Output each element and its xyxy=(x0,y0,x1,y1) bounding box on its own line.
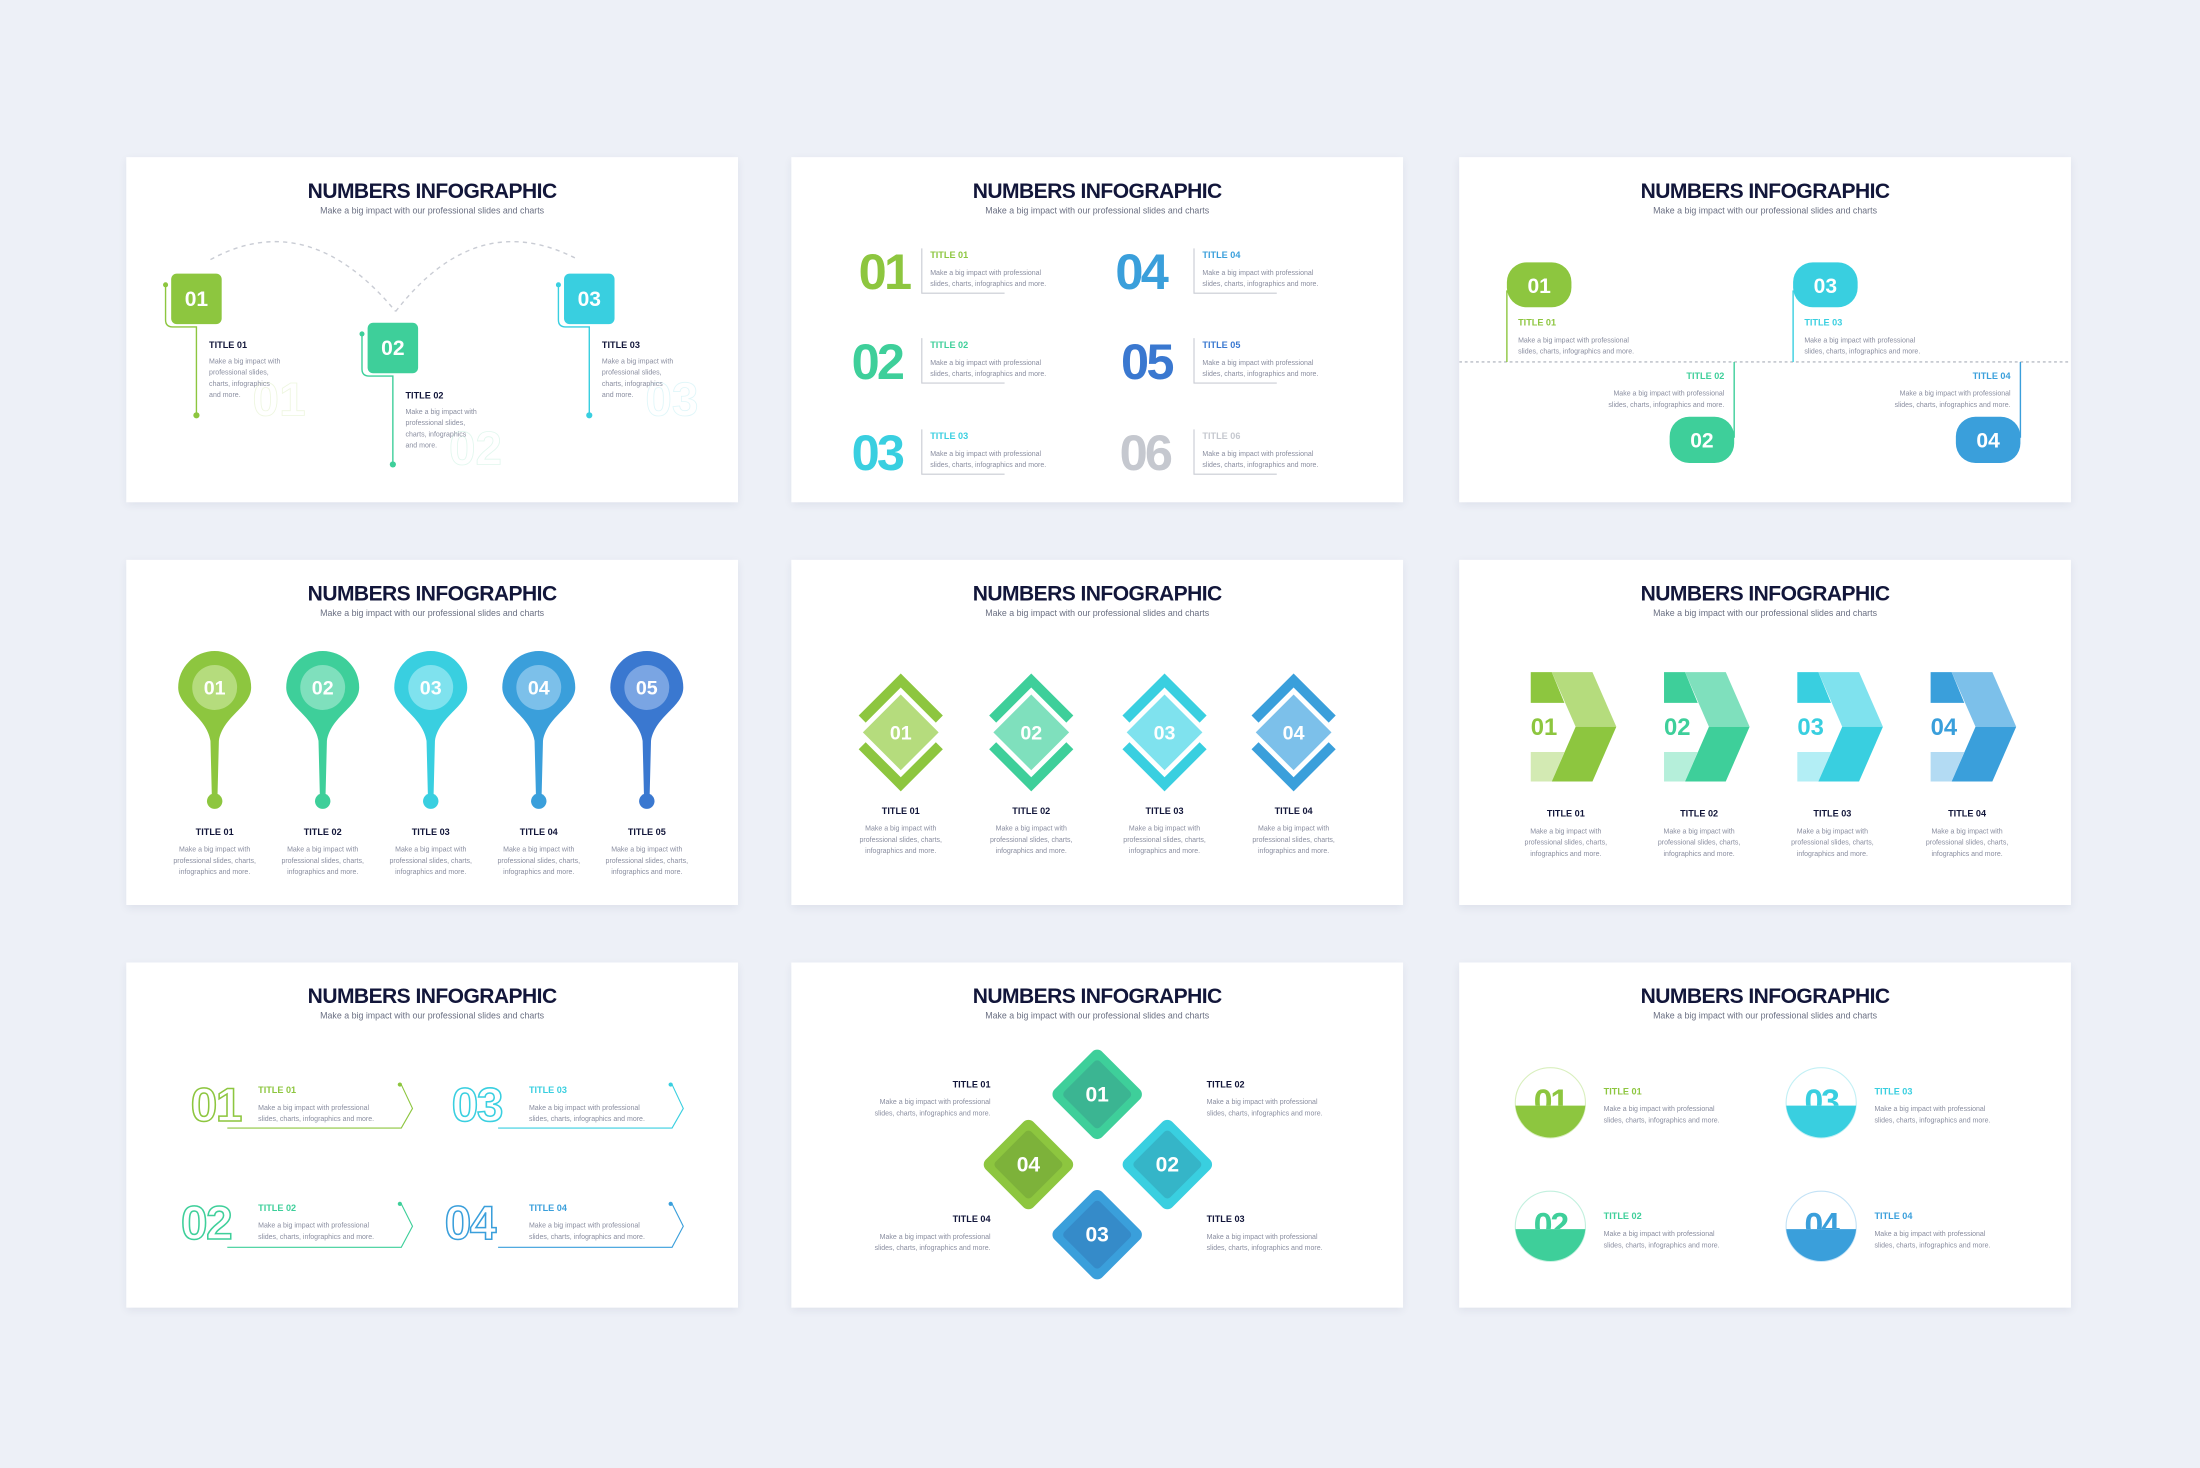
text: desc 01: professional slides, xyxy=(209,369,269,377)
diagram: timeline: TITLE 04 xyxy=(1973,371,2012,381)
diagram: chevrons: infographics and more. xyxy=(1530,851,1601,858)
diagram: numbers list: 02 xyxy=(852,333,904,390)
diagram: outline numbers: TITLE 02 xyxy=(258,1203,296,1213)
diagram: outline numbers: slides, charts, infographics and more. xyxy=(529,1234,645,1241)
diagram: boxes and connectors xyxy=(163,240,698,475)
diagram: numbers list: TITLE 05 xyxy=(1202,340,1240,350)
diagram: chevrons: 03 xyxy=(1797,714,1824,741)
diagram: chevrons: Make a big impact with xyxy=(1931,828,2003,835)
diagram: drops: infographics and more. xyxy=(287,869,358,876)
diagram: half circles: Make a big impact with professional xyxy=(1874,1231,1986,1238)
diagram: outline numbers: TITLE 04 xyxy=(529,1203,568,1213)
text: desc 03: charts, infographics xyxy=(602,380,663,389)
heading: NUMBERS INFOGRAPHIC xyxy=(308,582,557,606)
diagram: numbers list: TITLE 02 xyxy=(930,340,968,350)
diagram: diamond cluster: 03 xyxy=(1085,1224,1109,1247)
diagram: chevrons: 04 xyxy=(1931,714,1958,741)
diagram: half circles: TITLE 03 xyxy=(1874,1086,1912,1096)
diagram: drops: TITLE 05 xyxy=(628,827,666,837)
diagram: diamond cluster: slides, charts, infographics and more. xyxy=(1207,1110,1323,1117)
diagram: outline numbers: 01 xyxy=(191,1079,242,1132)
diagram: drops: professional slides, charts, xyxy=(389,858,472,865)
diagram: timeline: 04 xyxy=(1976,430,2000,453)
diagram: numbers list: 05 xyxy=(1121,333,1173,390)
diagram: chevrons: infographics and more. xyxy=(1931,851,2003,858)
diagram: timeline: Make a big impact with professional xyxy=(1804,337,1916,344)
diagram: numbers list: slides, charts, infographics and more. xyxy=(930,462,1046,469)
diagram: drops xyxy=(173,651,688,876)
diagram: timeline: 01 xyxy=(1527,275,1551,298)
text: title 01: TITLE 01 xyxy=(209,341,247,351)
diagram: half circles: 02 xyxy=(1534,1207,1568,1244)
diagram: outline numbers: Make a big impact with professional xyxy=(529,1223,640,1230)
diagram: numbers list: Make a big impact with professional xyxy=(1202,451,1314,458)
diagram: drops: Make a big impact with xyxy=(179,847,250,854)
panel: slide 2 big numbers list xyxy=(791,157,1403,502)
diagram: numbers list: Make a big impact with professional xyxy=(930,270,1042,277)
diagram: outline numbers: Make a big impact with professional xyxy=(529,1105,640,1112)
subtitle: Make a big impact with our professional slides and charts xyxy=(1653,1012,1877,1021)
diagram: timeline: slides, charts, infographics and more. xyxy=(1518,349,1634,356)
diagram: diamond cluster: 01 xyxy=(1085,1083,1109,1106)
subtitle: Make a big impact with our professional slides and charts xyxy=(1653,609,1877,619)
diagram: numbers list: slides, charts, infographics and more. xyxy=(1202,371,1318,378)
text: desc 02: charts, infographics xyxy=(405,431,466,439)
diagram: drops: infographics and more. xyxy=(503,869,574,876)
text: desc 02: and more. xyxy=(405,442,437,450)
subtitle: Make a big impact with our professional slides and charts xyxy=(985,609,1209,619)
diagram: drops: Make a big impact with xyxy=(287,847,358,854)
diagram: outline numbers: 02 xyxy=(181,1197,231,1250)
heading: NUMBERS INFOGRAPHIC xyxy=(308,985,557,1009)
diagram: timeline: slides, charts, infographics and more. xyxy=(1895,402,2011,409)
diagram: diamond cluster: Make a big impact with professional xyxy=(880,1234,991,1241)
diagram: chevrons: infographics and more. xyxy=(1663,851,1735,858)
diagram: half circles xyxy=(1514,1067,1990,1262)
diagram: diamonds: 02 xyxy=(1020,722,1042,744)
diagram: outline numbers: 03 xyxy=(452,1079,502,1132)
text: desc 01: and more. xyxy=(209,391,241,400)
heading: NUMBERS INFOGRAPHIC xyxy=(973,582,1222,606)
diagram: timeline: slides, charts, infographics and more. xyxy=(1608,402,1724,409)
text: desc 02: Make a big impact with xyxy=(405,408,477,417)
diagram: drops: infographics and more. xyxy=(179,869,250,876)
diagram: boxes and connectors: 01 xyxy=(253,373,306,426)
diagram: diamonds: TITLE 03 xyxy=(1146,806,1184,816)
diagram: numbers list: TITLE 01 xyxy=(930,250,968,260)
diagram: drops: TITLE 04 xyxy=(520,827,559,837)
diagram: timeline: Make a big impact with professional xyxy=(1900,391,2011,398)
diagram: diamonds: infographics and more. xyxy=(996,848,1067,855)
diagram: numbers list: slides, charts, infographics and more. xyxy=(1202,281,1318,288)
diagram: diamonds: 04 xyxy=(1283,722,1305,744)
diagram: diamond cluster: slides, charts, infographics and more. xyxy=(1207,1245,1323,1252)
diagram: half circles: TITLE 02 xyxy=(1604,1211,1642,1221)
diagram: outline numbers: slides, charts, infographics and more. xyxy=(258,1116,374,1123)
diagram: diamond cluster: Make a big impact with professional xyxy=(1207,1234,1318,1241)
panel: slide 9 half circles xyxy=(1459,962,2071,1308)
text: desc 01: charts, infographics xyxy=(209,380,270,389)
heading: NUMBERS INFOGRAPHIC xyxy=(1641,582,1890,606)
diagram: diamond cluster: TITLE 01 xyxy=(953,1079,991,1089)
heading: NUMBERS INFOGRAPHIC xyxy=(1641,985,1890,1009)
diagram: diamonds: TITLE 01 xyxy=(882,806,920,816)
diagram: drops: TITLE 01 xyxy=(196,827,234,837)
diagram: boxes and connectors: 02 xyxy=(381,337,405,360)
text: title 03: TITLE 03 xyxy=(602,341,640,351)
diagram: chevrons: professional slides, charts, xyxy=(1791,840,1874,847)
diagram: timeline: TITLE 01 xyxy=(1518,318,1556,328)
diagram: timeline: 03 xyxy=(1814,275,1837,298)
heading: NUMBERS INFOGRAPHIC xyxy=(973,180,1222,203)
diagram: diamond cluster: slides, charts, infographics and more. xyxy=(875,1245,991,1252)
diagram: diamonds: Make a big impact with xyxy=(865,826,936,833)
diagram: timeline: slides, charts, infographics and more. xyxy=(1804,349,1920,356)
subtitle: Make a big impact with our professional slides and charts xyxy=(320,206,544,216)
diagram: drops: Make a big impact with xyxy=(611,847,683,854)
diagram: timeline xyxy=(1459,262,2068,463)
diagram: chevrons: infographics and more. xyxy=(1797,851,1868,858)
diagram: numbers list: Make a big impact with professional xyxy=(930,451,1042,458)
diagram: numbers list: TITLE 03 xyxy=(930,431,968,441)
diagram: diamonds: infographics and more. xyxy=(1258,848,1329,855)
diagram: chevrons: TITLE 04 xyxy=(1948,809,1987,819)
diagram: diamond cluster: Make a big impact with professional xyxy=(880,1099,991,1106)
diagram: half circles: slides, charts, infographics and more. xyxy=(1874,1242,1990,1249)
diagram: numbers list: Make a big impact with professional xyxy=(1202,270,1314,277)
diagram: numbers list xyxy=(852,243,1318,481)
diagram: numbers list: Make a big impact with professional xyxy=(1202,360,1314,367)
diagram: outline numbers: Make a big impact with professional xyxy=(258,1223,369,1230)
diagram: half circles: Make a big impact with professional xyxy=(1874,1106,1986,1113)
diagram: chevrons: TITLE 02 xyxy=(1680,809,1718,819)
diagram: half circles: 03 xyxy=(1805,1084,1839,1121)
diagram: numbers list: 04 xyxy=(1115,243,1169,300)
diagram: diamonds: Make a big impact with xyxy=(996,826,1067,833)
text: desc 03: Make a big impact with xyxy=(602,358,673,366)
text: desc 03: and more. xyxy=(602,391,634,400)
diagram: diamonds: professional slides, charts, xyxy=(860,837,942,844)
diagram: drops: 01 xyxy=(204,678,226,700)
diagram: half circles: slides, charts, infographics and more. xyxy=(1604,1242,1720,1249)
subtitle: Make a big impact with our professional slides and charts xyxy=(985,206,1209,216)
diagram: diamond cluster: TITLE 04 xyxy=(953,1214,991,1224)
subtitle: Make a big impact with our professional slides and charts xyxy=(1653,206,1877,216)
diagram: numbers list: TITLE 04 xyxy=(1202,250,1241,260)
diagram: drops: Make a big impact with xyxy=(395,847,466,854)
text: desc 02: professional slides, xyxy=(405,420,465,428)
heading: NUMBERS INFOGRAPHIC xyxy=(973,985,1222,1009)
panel: slide 3 timeline pills xyxy=(1459,157,2071,502)
diagram: boxes and connectors: 01 xyxy=(185,288,208,311)
diagram: drops: professional slides, charts, xyxy=(173,858,256,865)
diagram: drops: 03 xyxy=(420,678,442,700)
panel: slide 8 diamond cluster xyxy=(791,962,1403,1308)
diagram: outline numbers: 04 xyxy=(445,1197,497,1250)
diagram: numbers list: slides, charts, infographics and more. xyxy=(930,281,1046,288)
diagram: half circles: TITLE 01 xyxy=(1604,1086,1642,1096)
diagram: boxes and connectors: 03 xyxy=(578,288,601,311)
diagram: half circles: TITLE 04 xyxy=(1874,1211,1913,1221)
diagram: numbers list: Make a big impact with professional xyxy=(930,360,1042,367)
diagram: drops: TITLE 03 xyxy=(412,827,450,837)
diagram: outline numbers: slides, charts, infographics and more. xyxy=(258,1234,374,1241)
heading: NUMBERS INFOGRAPHIC xyxy=(308,180,557,203)
subtitle: Make a big impact with our professional slides and charts xyxy=(320,1012,544,1021)
diagram: diamond cluster: 02 xyxy=(1156,1154,1179,1177)
diagram: numbers list: 03 xyxy=(852,424,904,481)
diagram: chevrons: professional slides, charts, xyxy=(1525,840,1607,847)
diagram: diamond cluster: slides, charts, infographics and more. xyxy=(875,1110,991,1117)
diagram: chevrons: Make a big impact with xyxy=(1797,828,1868,835)
panel: slide 5 diamonds row xyxy=(791,560,1403,905)
diagram: drops: infographics and more. xyxy=(395,869,466,876)
diagram: diamonds xyxy=(858,674,1336,855)
diagram: outline numbers: Make a big impact with professional xyxy=(258,1105,369,1112)
diagram: numbers list: 01 xyxy=(859,243,911,300)
diagram: chevrons: professional slides, charts, xyxy=(1658,840,1740,847)
diagram: half circles: Make a big impact with professional xyxy=(1604,1231,1715,1238)
text: desc 01 xyxy=(209,358,280,400)
diagram: diamond cluster: TITLE 03 xyxy=(1207,1214,1245,1224)
diagram: outline numbers: slides, charts, infographics and more. xyxy=(529,1116,645,1123)
subtitle: Make a big impact with our professional slides and charts xyxy=(985,1012,1209,1021)
diagram: timeline: TITLE 03 xyxy=(1804,318,1842,328)
diagram: diamond cluster: Make a big impact with professional xyxy=(1207,1099,1318,1106)
diagram: diamonds: infographics and more. xyxy=(865,848,936,855)
diagram: drops: Make a big impact with xyxy=(503,847,574,854)
text: title 02: TITLE 02 xyxy=(405,391,443,401)
diagram: chevrons: professional slides, charts, xyxy=(1926,840,2008,847)
diagram: chevrons: 02 xyxy=(1664,714,1691,741)
diagram: outline numbers: TITLE 01 xyxy=(258,1085,296,1095)
text: desc 03: professional slides, xyxy=(602,369,662,377)
diagram: diamonds: Make a big impact with xyxy=(1258,826,1329,833)
diagram: drops: infographics and more. xyxy=(611,869,682,876)
diagram: diamonds: 01 xyxy=(890,722,912,744)
diagram: diamonds: 03 xyxy=(1154,722,1176,744)
diagram: numbers list: 06 xyxy=(1120,424,1172,481)
diagram: half circles: 04 xyxy=(1805,1207,1840,1244)
diagram: boxes and connectors: 03 xyxy=(645,373,698,426)
text: desc 02 xyxy=(405,408,477,450)
diagram: drops: 02 xyxy=(312,678,334,700)
diagram: chevrons xyxy=(1524,672,2016,858)
diagram: diamonds: professional slides, charts, xyxy=(1252,837,1335,844)
diagram: chevrons: TITLE 01 xyxy=(1547,809,1585,819)
diagram: diamond cluster: TITLE 02 xyxy=(1207,1079,1245,1089)
diagram: timeline: Make a big impact with professional xyxy=(1518,337,1629,344)
diagram: chevrons: Make a big impact with xyxy=(1530,828,1602,835)
diagram: outline numbers xyxy=(181,1079,684,1250)
diagram: timeline: 02 xyxy=(1690,430,1714,453)
diagram: diamonds: Make a big impact with xyxy=(1129,826,1200,833)
diagram: drops: 04 xyxy=(528,678,550,700)
diagram: chevrons: TITLE 03 xyxy=(1813,809,1851,819)
diagram: numbers list: slides, charts, infographics and more. xyxy=(930,371,1046,378)
diagram: outline numbers: TITLE 03 xyxy=(529,1085,567,1095)
diagram: chevrons: Make a big impact with xyxy=(1664,828,1735,835)
panel: slide 7 outline numbers xyxy=(126,962,738,1308)
diagram: boxes and connectors: 02 xyxy=(449,422,502,475)
diagram: drops: professional slides, charts, xyxy=(281,858,364,865)
diagram: drops: professional slides, charts, xyxy=(606,858,688,865)
diagram: diamond cluster xyxy=(874,1050,1323,1280)
diagram: drops: TITLE 02 xyxy=(304,827,342,837)
heading: NUMBERS INFOGRAPHIC xyxy=(1641,180,1890,203)
diagram: drops: professional slides, charts, xyxy=(498,858,580,865)
diagram: diamond cluster: 04 xyxy=(1017,1154,1040,1177)
panel: slide 1 square steps xyxy=(126,157,738,502)
text: desc 01: Make a big impact with xyxy=(209,358,280,366)
diagram: drops: 05 xyxy=(636,678,658,700)
panel: slide 4 drops xyxy=(126,560,738,905)
diagram: diamonds: TITLE 02 xyxy=(1012,806,1050,816)
panel: slide 6 chevrons xyxy=(1459,560,2071,905)
diagram: diamonds: TITLE 04 xyxy=(1275,806,1314,816)
text: desc 03 xyxy=(602,358,673,400)
diagram: diamonds: infographics and more. xyxy=(1129,848,1200,855)
subtitle: Make a big impact with our professional slides and charts xyxy=(320,609,544,619)
diagram: half circles: slides, charts, infographics and more. xyxy=(1604,1117,1720,1124)
diagram: half circles: 01 xyxy=(1534,1084,1568,1121)
diagram: timeline: TITLE 02 xyxy=(1686,371,1724,381)
diagram: timeline: Make a big impact with professional xyxy=(1613,391,1725,398)
diagram: chevrons: 01 xyxy=(1531,714,1557,741)
diagram: diamonds: professional slides, charts, xyxy=(990,837,1073,844)
diagram: half circles: slides, charts, infographics and more. xyxy=(1874,1117,1990,1124)
diagram: half circles: Make a big impact with professional xyxy=(1604,1106,1715,1113)
diagram: numbers list: TITLE 06 xyxy=(1202,431,1240,441)
diagram: numbers list: slides, charts, infographics and more. xyxy=(1202,462,1318,469)
diagram: diamonds: professional slides, charts, xyxy=(1123,837,1206,844)
